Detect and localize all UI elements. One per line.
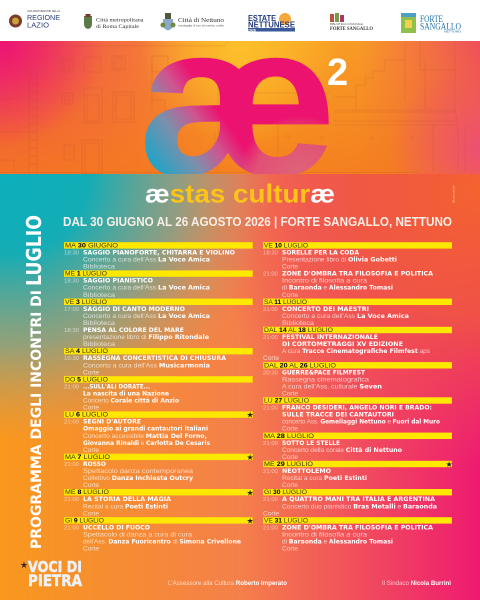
date: GI 9 luglio: GI 9 LUGLIO bbox=[65, 517, 104, 524]
date: VE 3 luglio: SAGGIO DI CANTO MODERNO bbox=[83, 307, 185, 313]
date: ME 1 luglio: 18:30 bbox=[64, 279, 79, 285]
date: LU 27 luglio bbox=[263, 397, 452, 433]
date: GI 9 luglio: ★ bbox=[246, 516, 254, 526]
date: SA 4 luglio: Concerto a cura dell'Ass Musicarmonia bbox=[83, 363, 210, 369]
date: SA 4 luglio: SA 4 LUGLIO bbox=[65, 348, 108, 355]
date: MA 7 luglio bbox=[64, 453, 254, 489]
date: VE 31 luglio: VE 31 LUGLIO bbox=[264, 517, 308, 524]
date: MA 28 luglio: SOTTO LE STELLE bbox=[282, 441, 340, 447]
date: GI 9 luglio bbox=[64, 516, 254, 553]
date: LU 27 luglio: Corte bbox=[282, 427, 299, 433]
date: ME 8 luglio: Corte bbox=[83, 511, 100, 517]
logo: Città di Nettuno bbox=[160, 13, 225, 30]
date: GI 30 luglio: Corte bbox=[263, 511, 280, 517]
superscript 2: 2 bbox=[327, 52, 348, 94]
date: VE 3 luglio bbox=[64, 299, 253, 348]
logo: Regione Lazio: LAZIO bbox=[27, 20, 49, 30]
date: VE 3 luglio: 17:00 bbox=[64, 307, 79, 313]
date: ME 8 luglio: ME 8 LUGLIO bbox=[65, 489, 109, 496]
title: aestas culturae: æstas cultur æ bbox=[145, 178, 335, 208]
logo: Città metropolitana di Roma Capitale: Città metropolitana bbox=[96, 18, 144, 24]
date: VE 10 luglio bbox=[263, 242, 452, 299]
logo: Forte Sangallo Nettuno: FORTE bbox=[420, 15, 443, 25]
date: LU 6 luglio: Corte bbox=[83, 448, 100, 454]
date: MA 28 luglio: Corte bbox=[282, 455, 299, 461]
date: LU 6 luglio: Concerto accessibile Mattia Del Forno, bbox=[83, 434, 207, 440]
date: SA 4 luglio: RASSEGNA CONCERTISTICA DI CHIUSURA bbox=[83, 356, 227, 362]
date: GI 9 luglio: dell'Ass. Danza Fuoricentro di Simona Crivellone bbox=[83, 540, 241, 546]
date: MA 7 luglio: Spettacolo danza contemporanea bbox=[83, 469, 194, 475]
top gradient band bbox=[0, 41, 480, 174]
logo: Città di Nettuno: Città di Nettuno bbox=[178, 17, 224, 24]
logo: Forte Sangallo Nettuno: SANGALLO bbox=[420, 22, 461, 32]
date: VE 10 luglio: Corte bbox=[282, 293, 299, 299]
date: dal 20 al 26 luglio: Rassegna cinematografica bbox=[282, 377, 370, 383]
date: SA 4 luglio: Corte bbox=[83, 370, 100, 376]
date: ME 8 luglio: ★ bbox=[246, 488, 254, 497]
date: VE 10 luglio: Incontro di filosofia a cura bbox=[282, 279, 368, 285]
date: VE 10 luglio: Corte bbox=[282, 265, 299, 271]
date: VE 10 luglio: 21:00 bbox=[263, 272, 278, 278]
date: GI 9 luglio: 21:00 bbox=[64, 525, 79, 531]
date: VE 3 luglio: presentazione libro di Filippo Ritondale bbox=[83, 335, 209, 341]
vertical heading: PROGRAMMA DEGLI INCONTRI DI bbox=[29, 290, 45, 549]
date: LU 6 luglio: SEGNI D'AUTORE bbox=[83, 420, 141, 426]
date: VE 31 luglio: Incontro di filosofia a cura bbox=[282, 532, 368, 538]
date: ME 29 luglio bbox=[263, 460, 453, 489]
logo: Biblioteca comunale Forte Sangallo: BIBLIOTECA COMUNALE bbox=[330, 22, 363, 26]
date: DO 5 luglio: DO 5 LUGLIO bbox=[65, 376, 108, 383]
date: LU 6 luglio: Giovanna Rinaldi e Carlotta De Cesaris bbox=[83, 441, 211, 447]
date: dal 20 al 26 luglio: GUERRE&PACE FILMFEST bbox=[282, 370, 365, 376]
date: LU 6 luglio: LU 6 LUGLIO bbox=[65, 412, 108, 419]
logo: Voci di Pietra: ★ bbox=[20, 561, 28, 571]
logo: Regione Lazio bbox=[9, 10, 61, 30]
date: MA 7 luglio: MA 7 LUGLIO bbox=[65, 454, 110, 461]
date: VE 10 luglio: 18:30 bbox=[263, 250, 278, 256]
vertical heading bbox=[22, 215, 46, 549]
date: VE 3 luglio: PENSA AL COLORE DEL MARE bbox=[83, 328, 184, 334]
date: ME 8 luglio bbox=[64, 488, 254, 517]
logo: Estate Nettunese: NETTUNESE bbox=[248, 20, 296, 30]
logo: Regione Lazio: REGIONE bbox=[27, 13, 60, 22]
date: DO 5 luglio: La nascita di una Nazione bbox=[83, 392, 169, 398]
date: ME 1 luglio: SAGGIO PIANISTICO bbox=[83, 279, 153, 285]
date: MA 7 luglio: 21:00 bbox=[64, 462, 79, 468]
date: VE 10 luglio: VE 10 LUGLIO bbox=[264, 242, 308, 249]
date: dal 14 al 18 luglio: DAL 14 AL 18 LUGLIO bbox=[264, 327, 333, 334]
date: LU 6 luglio bbox=[64, 411, 254, 454]
date: MA 7 luglio: ★ bbox=[246, 453, 254, 462]
date: VE 10 luglio: SORELLE PER LA CODA bbox=[282, 250, 360, 256]
date: SA 11 luglio: Biblioteca bbox=[282, 321, 315, 327]
credit: illustrazioni bbox=[452, 184, 456, 203]
date: LU 27 luglio: SULLE TRACCE DEI CANTAUTORI bbox=[282, 413, 394, 419]
date: GI 9 luglio: Spettacolo di danza a cura di cura bbox=[83, 532, 193, 538]
date: VE 31 luglio: 21:00 bbox=[263, 525, 278, 531]
date: VE 3 luglio: Concerto a cura dell'Ass La Voce Amica bbox=[83, 314, 210, 320]
date: VE 10 luglio: Presentazione libro di Olivia Gobetti bbox=[282, 258, 397, 264]
logo: Città di Nettuno: medaglia d'oro al merito civile bbox=[178, 24, 225, 28]
date: MA 7 luglio: Collettivo Danza Inchiesta Outcry bbox=[83, 476, 193, 482]
date: MA 28 luglio: MA 28 LUGLIO bbox=[264, 433, 314, 440]
date: SA 11 luglio: Concerto a cura dell'Ass La Voce Amica bbox=[282, 314, 409, 320]
date: GI 30 luglio: 21:00 bbox=[263, 497, 278, 503]
date: ME 1 luglio: ME 1 LUGLIO bbox=[65, 271, 107, 278]
date: MA 28 luglio: 21:00 bbox=[263, 441, 278, 447]
date: VE 3 luglio: Biblioteca bbox=[83, 321, 116, 327]
date: dal 14 al 18 luglio: DI CORTOMETRAGGI XV EDIZIONE bbox=[282, 342, 403, 348]
date: VE 31 luglio bbox=[263, 517, 452, 553]
date: ME 8 luglio: Recital a cura Poeti Estinti bbox=[83, 504, 168, 510]
date: LU 6 luglio: ★ bbox=[246, 411, 254, 420]
date: ME 8 luglio: 21:00 bbox=[64, 497, 79, 503]
date: dal 20 al 26 luglio: Corte bbox=[282, 392, 299, 398]
date: ME 29 luglio: Recital a cura Poeti Estinti bbox=[282, 476, 367, 482]
logo: Città metropolitana di Roma Capitale bbox=[84, 14, 144, 30]
date: SA 11 luglio: CONCERTO DEI MAESTRI bbox=[282, 307, 369, 313]
footer: assessore: L'Assessore alla Cultura Roberto Imperato bbox=[168, 581, 287, 587]
date: DO 5 luglio: Concerto Corale città di Anzio bbox=[83, 398, 179, 404]
date: LU 27 luglio: LU 27 LUGLIO bbox=[264, 398, 309, 404]
logo: Estate Nettunese: ESTATE bbox=[248, 14, 277, 23]
date: VE 3 luglio: 18:30 bbox=[64, 328, 79, 334]
date: DO 5 luglio: Corte bbox=[83, 406, 100, 412]
date: SA 11 luglio bbox=[263, 299, 452, 327]
date: dal 20 al 26 luglio: A cura dell'Ass. culturale Seven bbox=[282, 384, 382, 390]
date: MA 28 luglio bbox=[263, 433, 452, 461]
date: ME 29 luglio: ME 29 LUGLIO bbox=[264, 461, 313, 468]
date: ME 29 luglio: NEOTTOLEMO bbox=[282, 469, 331, 475]
logo: Regione Lazio: UNA PARTNERSHIP DELLA bbox=[27, 10, 61, 13]
left column bbox=[64, 242, 254, 553]
vertical heading: LUGLIO bbox=[22, 215, 46, 286]
date: dal 14 al 18 luglio: FESTIVAL INTERNAZIONALE bbox=[282, 335, 378, 341]
logo: Voci di Pietra: PIETRA bbox=[28, 571, 83, 590]
date: VE 3 luglio: VE 3 LUGLIO bbox=[65, 299, 107, 306]
date: ME 1 luglio bbox=[64, 270, 253, 299]
date: SA 4 luglio: 16:30 bbox=[64, 356, 79, 362]
date: LU 27 luglio: FRANCO DESIDERI, ANGELO NORI E BRADO: bbox=[282, 406, 432, 412]
date: VE 10 luglio: ZONE D'OMBRA TRA FILOSOFIA E POLITICA bbox=[282, 272, 434, 278]
logo: Città metropolitana di Roma Capitale: di Roma Capitale bbox=[96, 24, 140, 30]
logo: Forte Sangallo Nettuno: NETTUNO bbox=[444, 32, 461, 34]
date: LU 27 luglio: concerto Ass. Gemellaggi Nettuno e Fuori dal Muro bbox=[282, 420, 440, 426]
date: dal 14 al 18 luglio: A cura Tracce Cinematografiche Filmfest aps bbox=[282, 349, 430, 355]
date: MA 30 giugno: SAGGIO PIANOFORTE, CHITARRA E VIOLINO bbox=[83, 250, 235, 256]
logo: Biblioteca comunale Forte Sangallo bbox=[330, 13, 373, 32]
date: LU 6 luglio: Omaggio ai grandi cantautori italiani bbox=[83, 427, 208, 433]
date: LU 27 luglio: 21:00 bbox=[263, 406, 278, 412]
date: DO 5 luglio: 21:00 bbox=[64, 384, 79, 390]
date: VE 3 luglio: Biblioteca bbox=[83, 342, 116, 348]
date: GI 30 luglio: Concerto duo pianistico Bras Metalli e Baraonda bbox=[282, 504, 437, 510]
date: MA 7 luglio: Corte bbox=[83, 483, 100, 489]
logo strip bbox=[9, 10, 461, 34]
date: ME 29 luglio: ★ bbox=[446, 460, 453, 469]
date: MA 7 luglio: ROSSO bbox=[83, 462, 106, 468]
big ae logo bbox=[145, 58, 329, 174]
date: ME 1 luglio: Concerto a cura dell'Ass La Voce Amica bbox=[83, 286, 210, 292]
date: GI 30 luglio bbox=[263, 489, 452, 517]
logo: Biblioteca comunale Forte Sangallo: FORTE SANGALLO bbox=[330, 27, 373, 32]
date: SA 11 luglio: SA 11 LUGLIO bbox=[264, 299, 307, 306]
date: dal 20 al 26 luglio: 20:30 bbox=[263, 370, 278, 376]
date: DO 5 luglio bbox=[64, 376, 253, 412]
date: GI 30 luglio: GI 30 LUGLIO bbox=[264, 489, 307, 496]
date: VE 10 luglio: di Baraonda e Alessandro Tomasi bbox=[282, 286, 393, 292]
date: ME 29 luglio: Corte bbox=[282, 483, 299, 489]
date: dal 14 al 18 luglio: 21:00 bbox=[263, 335, 278, 341]
date: VE 31 luglio: ZONE D'OMBRA TRA FILOSOFIA E POLITICA bbox=[282, 525, 434, 531]
lower gradient background bbox=[0, 174, 480, 600]
logo: Estate Nettunese: 2026 bbox=[248, 28, 256, 32]
date: dal 14 al 18 luglio bbox=[263, 327, 452, 362]
date: dal 20 al 26 luglio: DAL 20 AL 26 LUGLIO bbox=[264, 362, 336, 369]
right column bbox=[263, 242, 453, 553]
date: MA 30 giugno: 18:30 bbox=[64, 250, 79, 256]
date: MA 30 giugno: Biblioteca bbox=[83, 265, 116, 271]
date: MA 30 giugno: Concerto a cura dell'Ass La Voce Amica bbox=[83, 258, 210, 264]
date: ME 29 luglio: 21:00 bbox=[263, 469, 278, 475]
date: MA 30 giugno: MA 30 GIUGNO bbox=[65, 242, 118, 249]
date: DO 5 luglio: ...SULL'ALI DORATE... bbox=[83, 384, 150, 390]
date: MA 30 giugno bbox=[64, 242, 253, 271]
logo: Forte Sangallo Nettuno bbox=[401, 13, 461, 34]
date: GI 30 luglio: A QUATTRO MANI TRA ITALIA E ARGENTINA bbox=[282, 497, 436, 503]
date: GI 9 luglio: Corte bbox=[83, 547, 100, 553]
footer: sindaco: Il Sindaco Nicola Burrini bbox=[382, 581, 451, 587]
fortress line drawing bbox=[0, 41, 465, 174]
date: ME 1 luglio: Biblioteca bbox=[83, 293, 116, 299]
date: dal 20 al 26 luglio bbox=[263, 362, 452, 398]
date: ME 8 luglio: LA STORIA DELLA MAGIA bbox=[83, 497, 172, 503]
date: dal 14 al 18 luglio: Corte bbox=[263, 356, 280, 362]
date: VE 31 luglio: di Baraonda e Alessandro Tomasi bbox=[282, 540, 393, 546]
logo: Voci di Pietra: VOCI DI bbox=[28, 558, 82, 576]
date: SA 4 luglio bbox=[64, 348, 253, 376]
date: SA 11 luglio: 21:00 bbox=[263, 307, 278, 313]
date: GI 9 luglio: UCCELLO DI FUOCO bbox=[83, 525, 150, 531]
date: VE 31 luglio: Corte bbox=[282, 547, 299, 553]
date: MA 28 luglio: Concerto della corale Città di Nettuno bbox=[282, 447, 402, 454]
date: LU 6 luglio: 21:00 bbox=[64, 420, 79, 426]
logo: Voci di Pietra bbox=[20, 558, 83, 590]
logo: Estate Nettunese bbox=[248, 13, 296, 32]
